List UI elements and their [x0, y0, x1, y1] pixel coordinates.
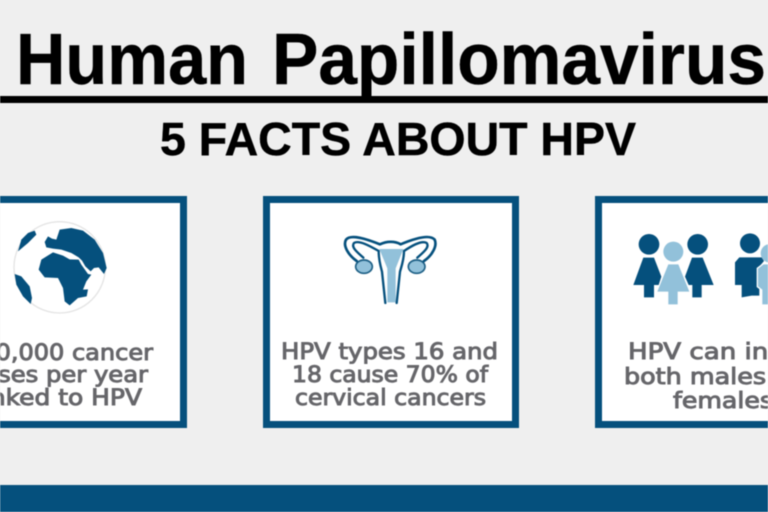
icon: group of people [633, 233, 768, 305]
panel: males and females [598, 200, 768, 424]
fact text: HPV types [281, 340, 498, 411]
bottom band [0, 485, 768, 512]
icon: globe [14, 222, 107, 313]
fact text: cancer cases [0, 341, 154, 411]
title [16, 20, 766, 100]
fact text: HPV types: 18 cause 70% of [292, 363, 489, 388]
subtitle: 5 FACTS ABOUT HPV [160, 113, 636, 165]
fact text: HPV types: HPV types 16 and [281, 340, 498, 365]
panel: HPV types [266, 200, 516, 424]
title underline [0, 96, 768, 103]
title: Human [16, 20, 248, 100]
icon: uterus [345, 237, 435, 303]
fact text: HPV types: cervical cancers [295, 386, 486, 411]
fact text: males and females [624, 340, 768, 414]
fact text: males and females: females [673, 389, 768, 414]
panel: cancer cases per year [0, 200, 184, 424]
